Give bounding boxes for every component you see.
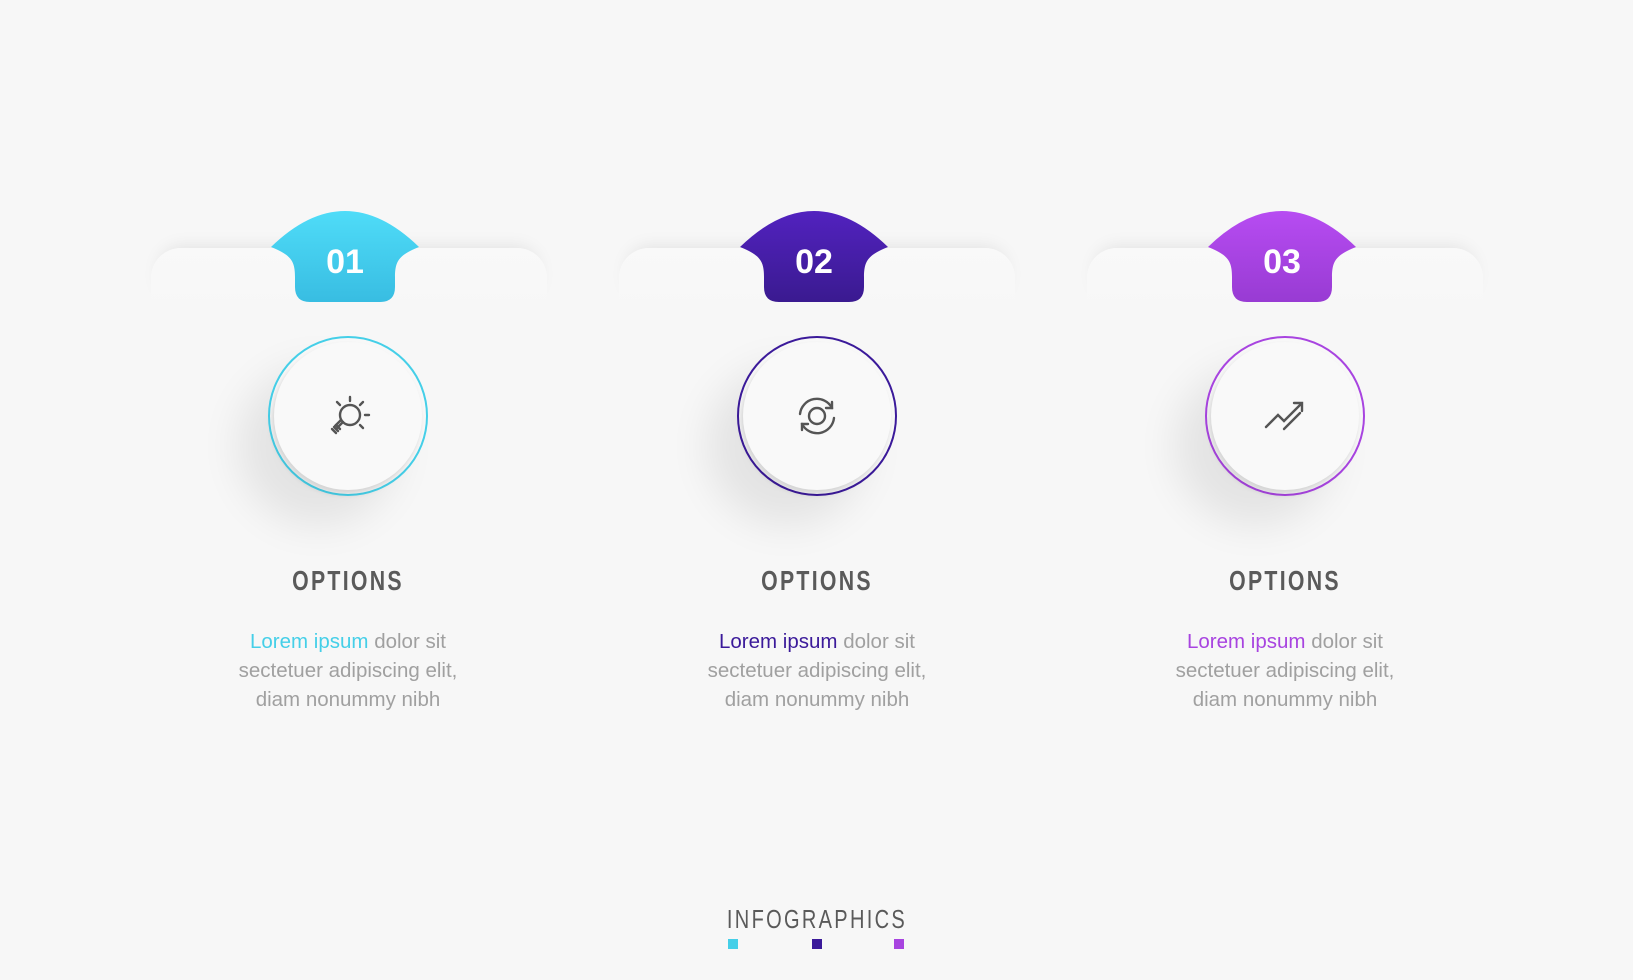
card: 2 [619, 248, 1015, 308]
icon: refresh [798, 398, 836, 434]
tab: 03 [1208, 211, 1356, 302]
icon: lightbulb [330, 396, 370, 434]
tab: 01 [271, 211, 419, 302]
circle: refresh [737, 336, 897, 496]
text: 3 [1176, 630, 1394, 711]
icon: trend [1264, 402, 1304, 430]
text: 1 [239, 630, 457, 711]
text: 2: Lorem ipsum dolor sit [719, 630, 915, 653]
text: 2: sectetuer adipiscing elit, [708, 659, 926, 682]
footer squares [728, 939, 904, 949]
heading: options 3: OPTIONS [1229, 565, 1341, 596]
text: 1: diam nonummy nibh [256, 688, 440, 711]
circle: lightbulb [268, 336, 428, 496]
text: 3: sectetuer adipiscing elit, [1176, 659, 1394, 682]
tab: 01: 01 [326, 243, 364, 281]
text: 2: diam nonummy nibh [725, 688, 909, 711]
tab: 03: 03 [1263, 243, 1301, 281]
text: 3: diam nonummy nibh [1193, 688, 1377, 711]
text: 2 [708, 630, 926, 711]
circle: chart [1205, 336, 1365, 496]
tab: 02: 02 [795, 243, 833, 281]
text: 1: sectetuer adipiscing elit, [239, 659, 457, 682]
footer title: INFOGRAPHICS [727, 904, 907, 934]
text: 1: Lorem ipsum dolor sit [250, 630, 446, 653]
tab: 02 [740, 211, 888, 302]
card: 3 [1087, 248, 1483, 308]
text: 3: Lorem ipsum dolor sit [1187, 630, 1383, 653]
card: 1 [151, 248, 547, 308]
heading: options 1: OPTIONS [292, 565, 404, 596]
heading: options 2: OPTIONS [761, 565, 873, 596]
